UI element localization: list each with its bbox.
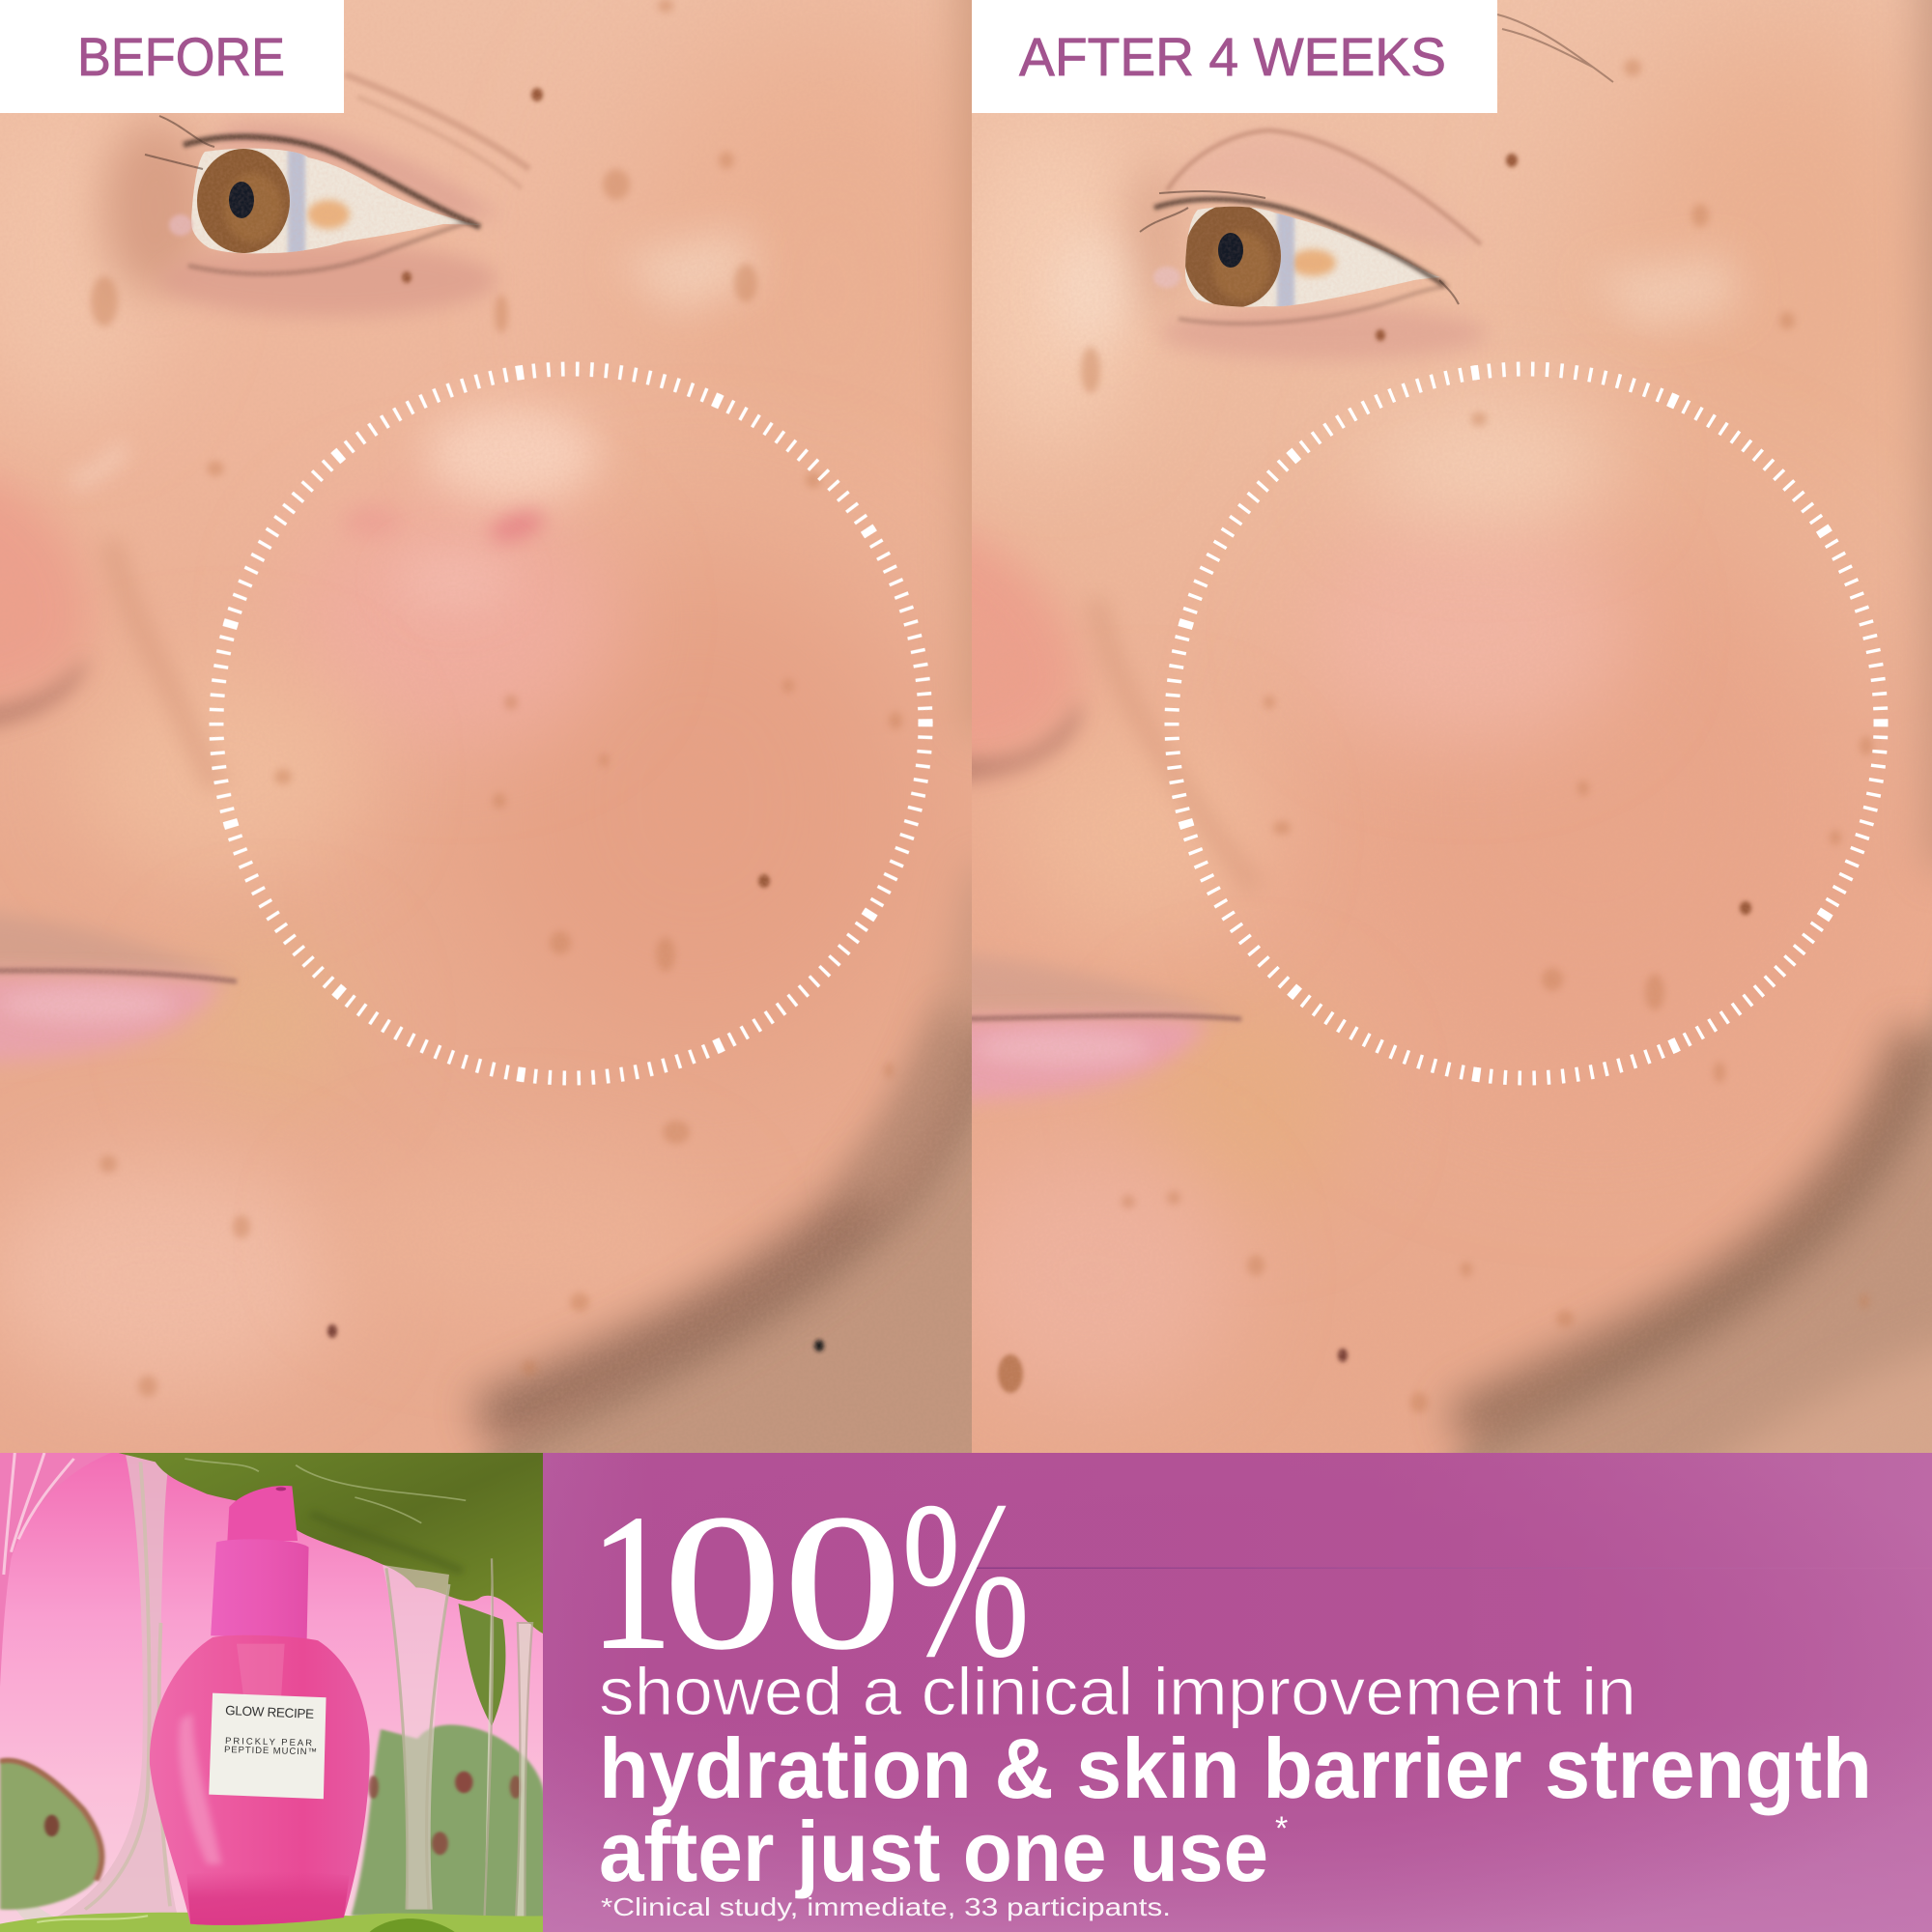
text: footnote: *Clinical study, immediate, 33 participants. xyxy=(601,1892,1171,1921)
text: bold claim line 1: hydration & skin barrier strength xyxy=(599,1720,1872,1816)
icon: gel ground xyxy=(0,1913,547,1932)
label: after 4 weeks xyxy=(972,0,1497,113)
icon: eye xyxy=(101,74,529,317)
icon: moles xyxy=(998,154,1751,1393)
icon: rosacea patch xyxy=(353,502,549,600)
text: product label: PEPTIDE MUCIN™ xyxy=(224,1745,317,1758)
icon: bottle xyxy=(150,1486,370,1925)
panel: claim xyxy=(543,1453,1932,1932)
label: before xyxy=(0,0,344,113)
icon: neck shadow xyxy=(1391,0,1932,1507)
icon: pink and clear gel strands xyxy=(0,1453,178,1927)
label: before: BEFORE xyxy=(77,26,285,87)
icon: cheekbone highlight xyxy=(618,227,758,314)
icon: cactus leaf xyxy=(118,1453,547,1635)
icon: lips xyxy=(0,908,242,1063)
icon: hair strands xyxy=(1497,14,1613,82)
text: product label: PRICKLY PEAR xyxy=(225,1736,312,1748)
icon: freckles xyxy=(91,0,902,1397)
icon: freckles xyxy=(1081,59,1873,1413)
text: product label xyxy=(224,1703,317,1758)
icon: cactus pads xyxy=(0,1604,547,1919)
circle marker: after xyxy=(1124,322,1928,1125)
icon: lips xyxy=(908,952,1246,1101)
stat: 100% xyxy=(590,1456,1030,1704)
icon: nose xyxy=(908,512,1256,889)
icon: right gel strands xyxy=(383,1558,532,1922)
label: product label xyxy=(209,1693,327,1799)
panel: before photo xyxy=(0,0,972,1453)
text: bold claim line 2: after just one use xyxy=(599,1804,1268,1899)
icon: cheekbone highlight xyxy=(1589,253,1739,328)
stat: 100%: % xyxy=(901,1456,1030,1704)
panel: after 4 weeks photo xyxy=(908,0,1932,1507)
stat: 100%: 1 xyxy=(590,1476,672,1690)
text: asterisk: * xyxy=(1275,1810,1288,1847)
icon: moles xyxy=(327,88,824,1351)
text: description: showed a clinical improvement in xyxy=(599,1654,1636,1729)
label: after 4 weeks: AFTER 4 WEEKS xyxy=(1019,26,1446,87)
icon: nose xyxy=(0,444,217,787)
stat: 100%: 00 xyxy=(664,1475,901,1690)
icon: eye xyxy=(1053,130,1488,360)
text: product label: GLOW RECIPE xyxy=(225,1703,314,1721)
panel: product photo xyxy=(0,1449,547,1932)
circle marker: before xyxy=(169,322,973,1125)
icon: neck shadow xyxy=(455,867,972,1453)
